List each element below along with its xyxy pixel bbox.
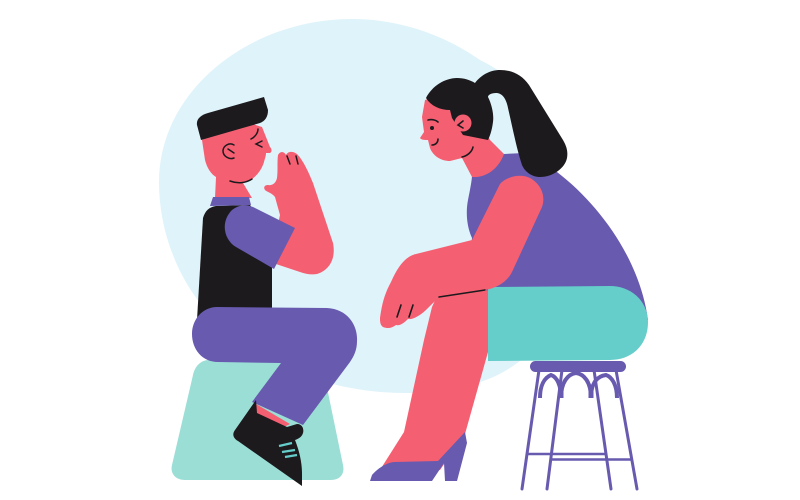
- shoe laces: [279, 443, 297, 457]
- man hands and arm: [264, 152, 334, 274]
- woman head and neck: [420, 95, 504, 177]
- stool legs: [522, 370, 637, 489]
- man figure: [192, 97, 357, 486]
- man sock: [255, 404, 290, 430]
- woman shoe: [370, 432, 467, 481]
- man hair: [197, 97, 268, 140]
- man vest: [197, 205, 272, 320]
- woman ear: [454, 114, 472, 132]
- man legs: [192, 307, 357, 425]
- woman eye: [430, 126, 434, 130]
- man collar: [210, 197, 251, 206]
- woman hair: [426, 70, 567, 177]
- woman face details: [397, 120, 485, 317]
- man face details: [223, 129, 298, 183]
- woman arm: [380, 176, 543, 328]
- woman figure: [370, 70, 648, 481]
- background blob: [159, 19, 547, 393]
- man shoe: [233, 400, 303, 486]
- man seat block: [172, 360, 343, 480]
- stool arches: [540, 373, 617, 398]
- man sleeve: [225, 205, 295, 269]
- stool seat: [530, 361, 626, 372]
- woman body dress: [467, 153, 648, 340]
- woman stool: [522, 361, 637, 489]
- woman leg: [380, 290, 490, 470]
- man head and neck: [202, 120, 272, 198]
- teal skirt: [488, 286, 648, 361]
